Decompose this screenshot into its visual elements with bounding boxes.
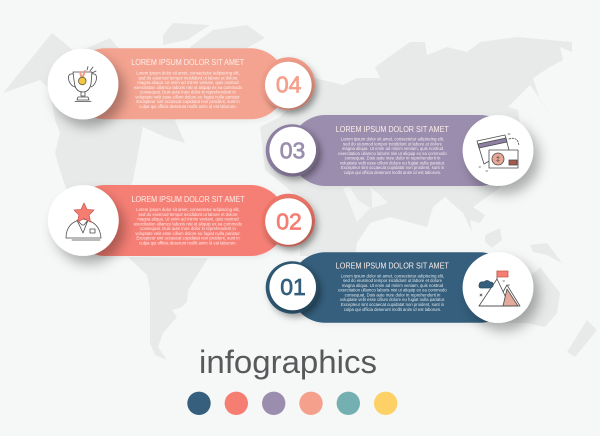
- panel 02 body text: Excepteur sint occaecat cupidatat non proident, sunt in: [136, 236, 240, 241]
- map: new zealand: [567, 320, 597, 357]
- panel 03 body text: [338, 137, 447, 175]
- panel 01 pill: [290, 252, 515, 323]
- panel 02: [48, 185, 315, 256]
- icon: trophy: [68, 66, 96, 102]
- panel 03 icon circle: [463, 115, 533, 186]
- panel 03: [266, 115, 533, 186]
- panel 02 number ring: [262, 194, 315, 247]
- panel 01 body text: Excepteur sint occaecat cupidatat non proident, sunt in: [341, 302, 445, 307]
- panel 01 body text: magna aliqua. Ut enim ad minim veniam, quis nostrud: [342, 283, 444, 288]
- panel 01 icon circle: [463, 252, 533, 323]
- panel 01 body text: sed do eiusmod tempor incididunt ut labore et dolore: [343, 278, 443, 283]
- map: australia: [500, 267, 560, 327]
- panel 01 number: 01: [280, 274, 306, 300]
- panel 01 body text: [338, 273, 447, 312]
- panel 01 number circle: [269, 264, 316, 310]
- panel 04 body text: voluptate velit esse cillum dolore eu fugiat nulla pariatur.: [135, 94, 241, 99]
- panel 04 body text: Excepteur sint occaecat cupidatat non proident, sunt in: [136, 99, 240, 104]
- panel 04 body text: Lorem ipsum dolor sit amet, consectetur adipiscing elit,: [136, 71, 240, 76]
- panel 04 body text: sed do eiusmod tempor incididunt ut labore et dolore: [138, 75, 238, 80]
- panel 04 body text: consequat. Duis aute irure dolor in reprehenderit in: [140, 90, 236, 95]
- panel 03 body text: culpa qui officia deserunt mollit anim id est laborum.: [344, 170, 441, 175]
- panel 02 body text: sed do eiusmod tempor incididunt ut labore et dolore: [138, 212, 238, 217]
- panel 03 body text: consequat. Duis aute irure dolor in reprehenderit in: [345, 156, 441, 161]
- panel 04 number ring: [262, 57, 315, 110]
- panel 04 body text: magna aliqua. Ut enim ad minim veniam, quis nostrud: [137, 80, 239, 85]
- map: greenland: [163, 23, 265, 55]
- panel 03 title: LOREM IPSUM DOLOR SIT AMET: [336, 125, 449, 134]
- world map: [3, 23, 597, 360]
- panel 01: [266, 252, 533, 323]
- panel 03 body text: Excepteur sint occaecat cupidatat non proident, sunt in: [341, 165, 445, 170]
- panel 02 title: LOREM IPSUM DOLOR SIT AMET: [132, 195, 245, 204]
- panel 04 number: 04: [276, 71, 302, 97]
- panel 01 body text: culpa qui officia deserunt mollit anim id est laborum.: [344, 307, 441, 312]
- panel 04: [48, 48, 315, 119]
- panel 02 number circle: [265, 198, 312, 245]
- panel 01 number ring: [266, 261, 318, 314]
- panel 03 number ring: [266, 124, 318, 177]
- panel 04 icon circle: [48, 49, 118, 119]
- map: north america: [3, 33, 185, 210]
- panel 02 body text: culpa qui officia deserunt mollit anim id est laborum.: [139, 240, 237, 245]
- panel 01 body text: exercitation ullamco laboris nisi ut aliquip ex ea commodo: [338, 288, 447, 293]
- panel 02 body text: consequat. Duis aute irure dolor in reprehenderit in: [140, 226, 236, 231]
- panel 01 title: LOREM IPSUM DOLOR SIT AMET: [336, 262, 449, 270]
- panel 03 number circle: [269, 127, 316, 173]
- map: eurasia and africa: [260, 37, 572, 256]
- icon: star and person: [66, 203, 101, 240]
- panel 04 pill: [70, 48, 286, 119]
- panel 03 body text: voluptate velit esse cillum dolore eu fugiat nulla pariatur.: [340, 160, 445, 165]
- panel 02 body text: voluptate velit esse cillum dolore eu fugiat nulla pariatur.: [135, 231, 241, 236]
- panel 01 body text: voluptate velit esse cillum dolore eu fugiat nulla pariatur.: [340, 297, 445, 302]
- panel 04 number circle: [265, 62, 312, 108]
- panel 01 body text: consequat. Duis aute irure dolor in reprehenderit in: [345, 292, 441, 298]
- panel 03 body text: Lorem ipsum dolor sit amet, consectetur adipiscing elit,: [341, 137, 444, 142]
- map: gap mediterranean: [343, 187, 388, 222]
- icon: mountain and flag: [479, 271, 520, 306]
- panel 03 number: 03: [280, 137, 305, 163]
- panel 03 body text: exercitation ullamco laboris nisi ut aliquip ex ea commodo: [338, 151, 447, 156]
- map: south america: [128, 257, 208, 360]
- panel 02 icon circle: [48, 185, 119, 256]
- panel 03 pill: [290, 115, 515, 186]
- panel 01 body text: Lorem ipsum dolor sit amet, consectetur adipiscing elit,: [341, 273, 444, 278]
- panel 04 body text: exercitation ullamco laboris nisi ut aliquip ex ea commodo: [134, 85, 243, 90]
- panel 02 body text: exercitation ullamco laboris nisi ut aliquip ex ea commodo: [134, 221, 243, 226]
- title: infographics: [199, 344, 377, 380]
- panel 03 body text: magna aliqua. Ut enim ad minim veniam, quis nostrud: [342, 146, 444, 151]
- panel 02 number: 02: [276, 208, 302, 234]
- map: islands: [485, 228, 562, 263]
- panel 04 body text: culpa qui officia deserunt mollit anim id est laborum.: [139, 104, 237, 109]
- panel 02 body text: Lorem ipsum dolor sit amet, consectetur adipiscing elit,: [136, 207, 240, 212]
- panel 02 body text: [134, 207, 243, 245]
- panel 02 body text: magna aliqua. Ut enim ad minim veniam, quis nostrud: [137, 216, 239, 222]
- colour dots legend: [187, 392, 397, 415]
- icon: cards and money: [477, 134, 519, 171]
- panel 02 pill: [70, 185, 286, 256]
- panel 03 body text: sed do eiusmod tempor incididunt ut labore et dolore: [343, 141, 443, 146]
- panel 04 body text: [134, 71, 243, 109]
- panel 04 title: LOREM IPSUM DOLOR SIT AMET: [131, 58, 244, 67]
